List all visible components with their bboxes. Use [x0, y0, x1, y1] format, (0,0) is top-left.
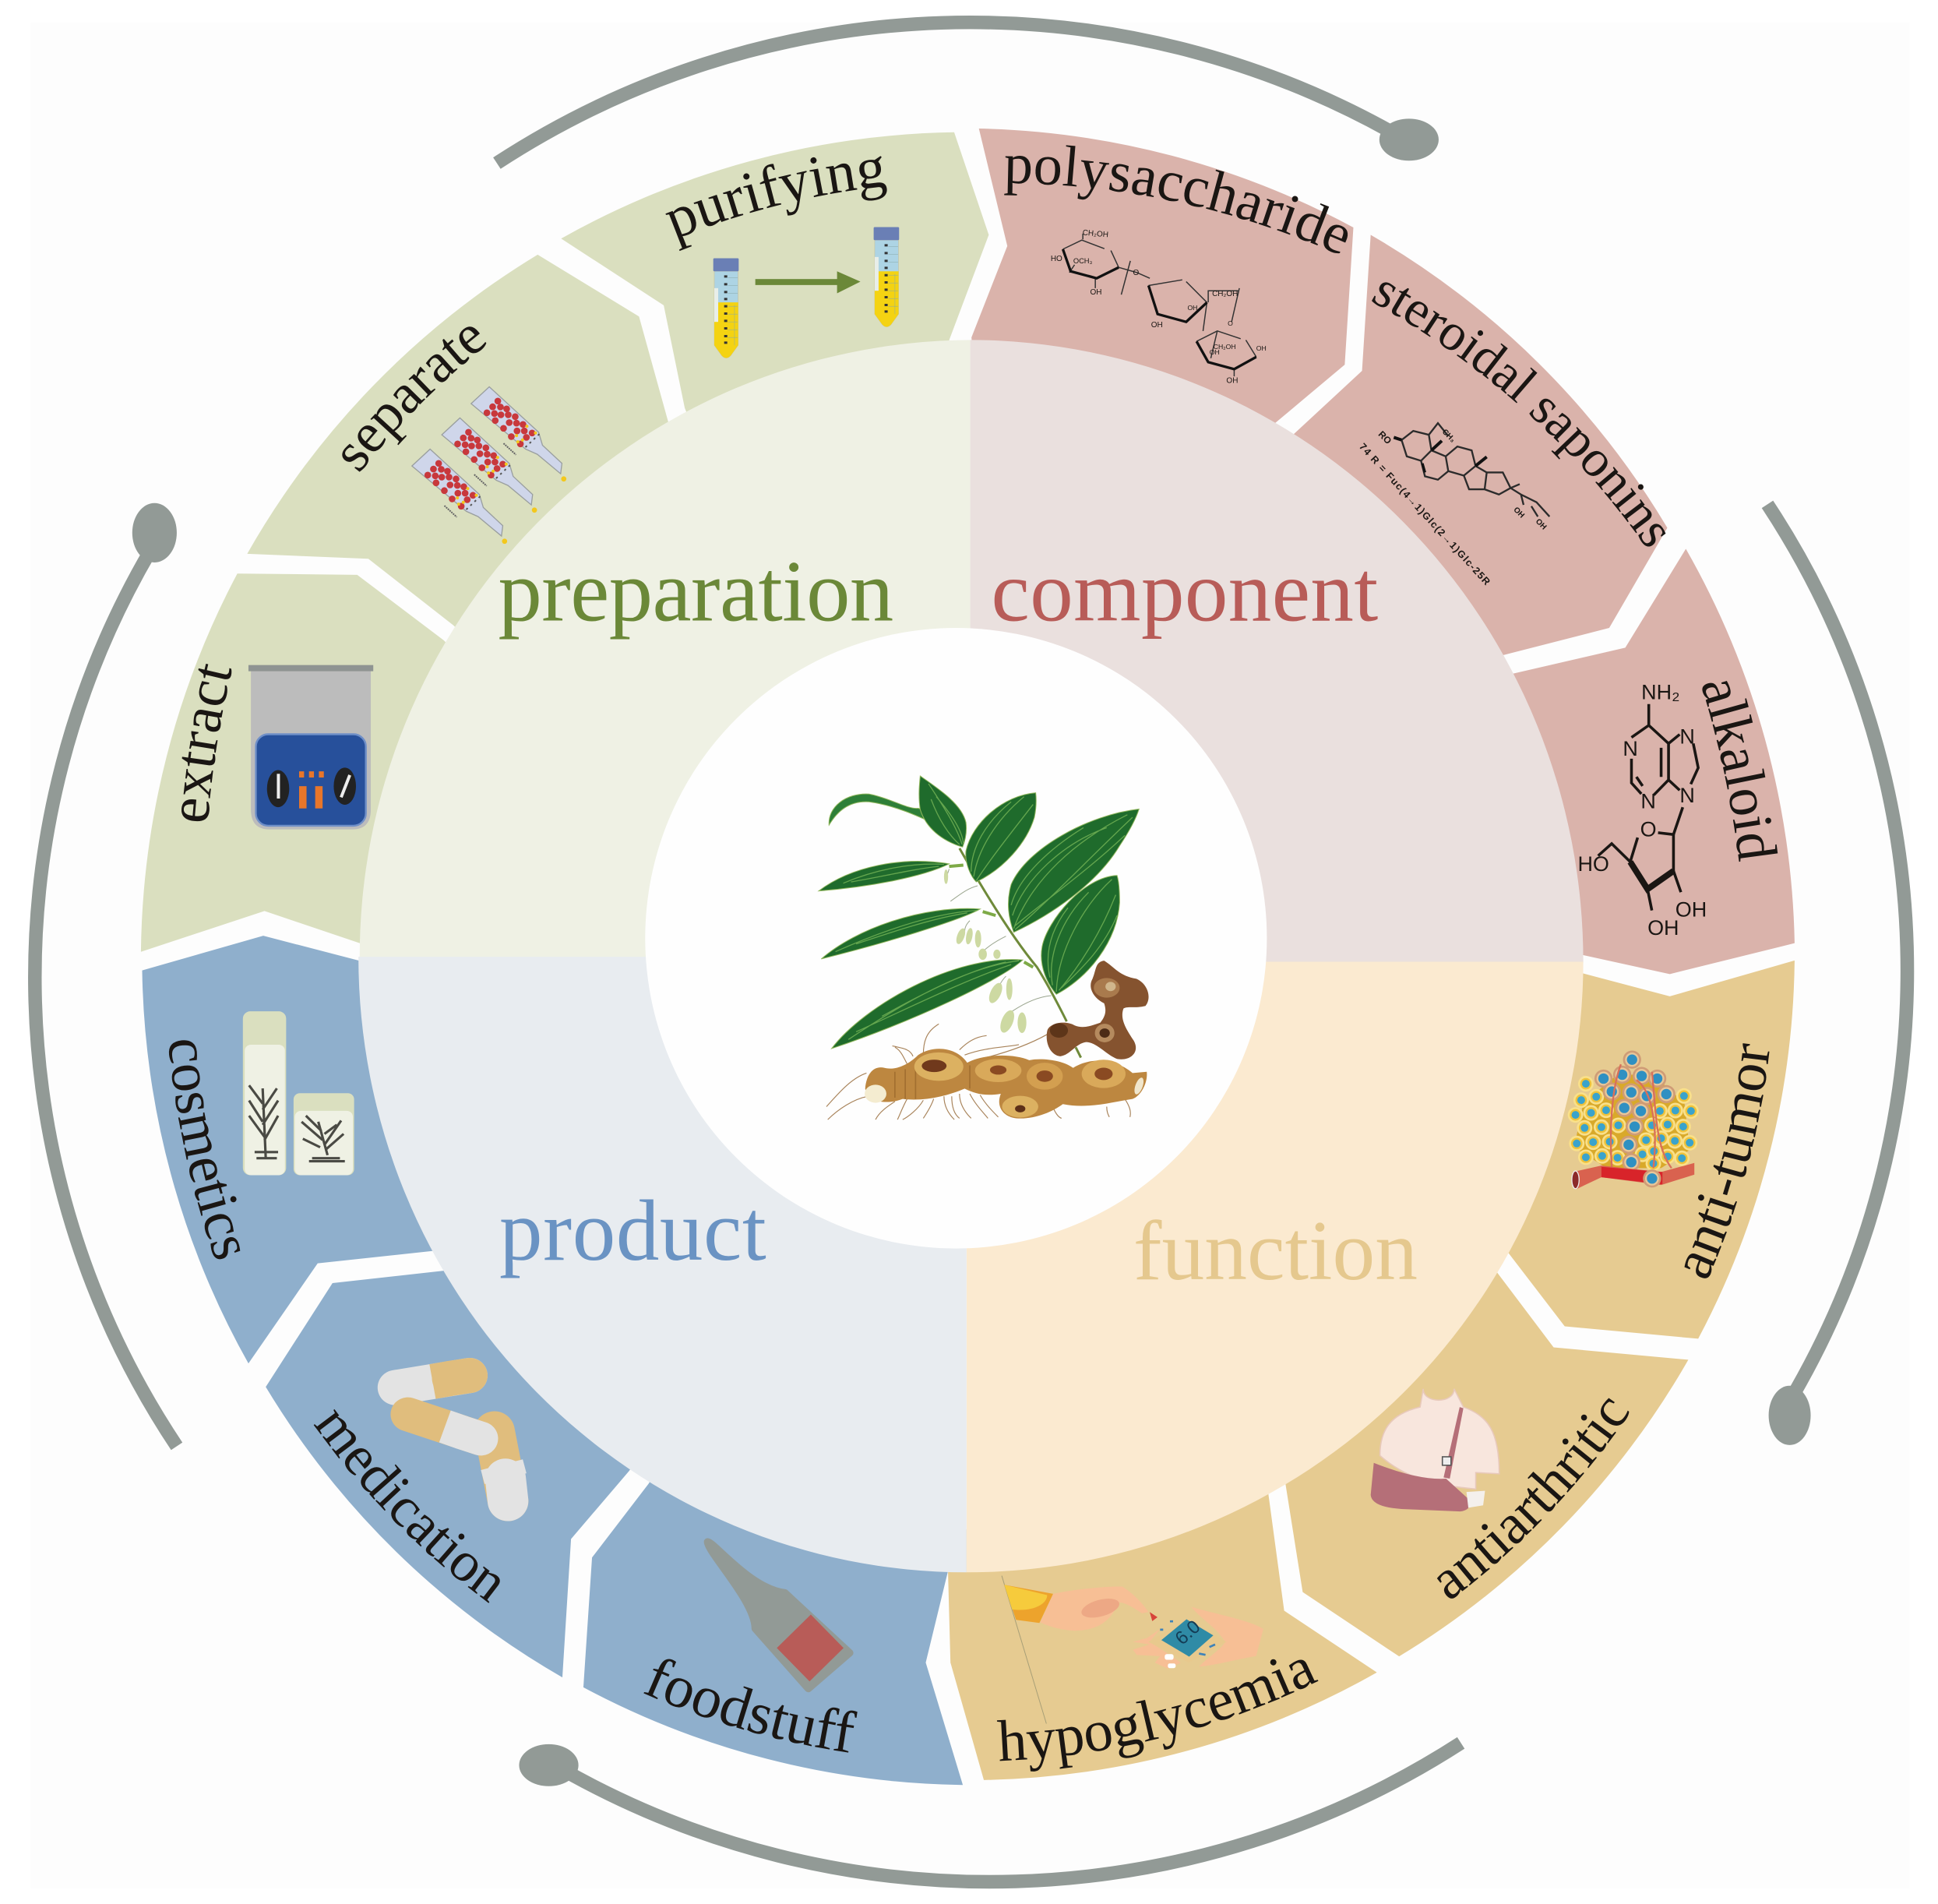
chemical structure: adenosine: OH [1647, 916, 1679, 940]
plant: dark rhizome [1047, 961, 1149, 1060]
chemical structure: steroidal saponin: RO [1376, 428, 1394, 446]
plant: roots [826, 1024, 1130, 1119]
sector: antiarthritic [1273, 1261, 1688, 1656]
arc: bottom with end dot [519, 1743, 1461, 1882]
chemical structure: adenosine: O [1640, 818, 1657, 841]
label: medication: medication [313, 1409, 500, 1603]
chemical structure: adenosine: N [1679, 784, 1695, 807]
inner white circle [645, 628, 1267, 1249]
chemical structure: steroidal saponin: OH [1534, 517, 1548, 531]
sector: separate [247, 255, 686, 661]
chemical structure: polysaccharide: O [1228, 319, 1233, 327]
chemical structure: steroidal saponin: CH₃ [1440, 428, 1457, 445]
heading: function: function [1133, 1203, 1418, 1298]
label: hypoglycemia: hypoglycemia [997, 1659, 1318, 1772]
plant: leaves [819, 776, 1139, 1049]
chemical structure: polysaccharide: OH [1187, 304, 1197, 312]
heading: component: component [992, 545, 1378, 640]
heading: preparation: preparation [498, 544, 893, 640]
chemical structure: polysaccharide: OCH₃ [1073, 257, 1093, 265]
chemical structure: adenosine: NH₂ [1641, 681, 1680, 703]
chemical structure: adenosine: N [1623, 737, 1638, 760]
label: steroidal saponins: steroidal saponins [1372, 282, 1665, 547]
label: foodstuff: foodstuff [643, 1659, 858, 1753]
sector: steroidal saponins [1273, 234, 1667, 668]
quadrant: preparation [360, 340, 971, 959]
chemical structure: polysaccharide: O [1133, 269, 1139, 277]
chemical structure: polysaccharide: CH₂OH [1214, 343, 1236, 351]
chemical structure: polysaccharide: OH [1226, 376, 1238, 385]
chemical structure: polysaccharide: OH [1210, 348, 1220, 356]
label: polysaccharide: polysaccharide [1004, 145, 1348, 254]
plant: tan rhizome [865, 1049, 1147, 1119]
plant: stem and flower stalks [946, 848, 1081, 1058]
quadrant: function [967, 961, 1584, 1572]
chemical structure: polysaccharide: OH [1151, 321, 1163, 330]
icon: glucose meter and hands: 6.0 [1172, 1617, 1204, 1649]
sector: hypoglycemia [948, 1458, 1377, 1780]
quadrant: component [971, 340, 1584, 963]
chemical structure: adenosine: OH [1675, 898, 1707, 921]
sector: foodstuff [583, 1446, 963, 1785]
chemical structure: polysaccharide: OH [1256, 344, 1267, 352]
chemical structure: polysaccharide: CH₂OH [1082, 229, 1108, 239]
label: extract: extract [181, 664, 232, 821]
sector: polysaccharide [971, 129, 1353, 457]
quadrant: product [358, 957, 967, 1572]
arc: right with end dot [1767, 504, 1908, 1445]
label: purifying: purifying [665, 156, 887, 251]
chemical structure: adenosine [1577, 681, 1707, 940]
arc: left with end dot [35, 503, 177, 1446]
icon: separation cartridges [412, 386, 566, 544]
chemical structure: polysaccharide [1051, 229, 1267, 385]
sector: anti-tumor [1471, 961, 1795, 1338]
icon: ultrasonic extractor [248, 665, 373, 830]
sector: cosmetics [142, 936, 457, 1363]
heading: product: product [499, 1183, 766, 1279]
chemical structure: steroidal saponin: 74 R = Fuc(4→1)Glc(2→1)Glc-25R [1357, 441, 1492, 587]
icon: tubes with arrow [714, 227, 899, 358]
chemical structure: polysaccharide: OH [1090, 288, 1101, 297]
arc: top with end dot [497, 23, 1439, 163]
central plant illustration [819, 776, 1149, 1119]
sector: extract [141, 573, 495, 952]
chemical structure: adenosine: HO [1577, 852, 1609, 876]
plant: leaf veins [836, 784, 1133, 1039]
label: cosmetics: cosmetics [168, 1040, 240, 1259]
chemical structure: polysaccharide: HO [1051, 255, 1062, 263]
icon: foodstuff bottle [707, 1542, 850, 1689]
chemical structure: steroidal saponin: OH [1512, 506, 1526, 520]
icon: glucose meter and hands [1002, 1576, 1263, 1723]
label: alkaloid: alkaloid [1702, 681, 1778, 862]
label: separate: separate [342, 326, 486, 472]
icon: arm sling [1371, 1389, 1499, 1511]
label: anti-tumor: anti-tumor [1684, 1043, 1770, 1278]
plant: flower buds [944, 869, 1027, 1035]
chemical structure: adenosine: N [1679, 725, 1695, 748]
sector: purifying [561, 132, 988, 457]
chemical structure: adenosine: N [1640, 790, 1656, 813]
chemical structure: steroidal saponin [1357, 423, 1549, 587]
icon: tumor with blood vessel [1568, 1050, 1699, 1189]
icon: cosmetic bottles [243, 1011, 354, 1175]
icon: capsules [396, 1376, 508, 1501]
label: antiarthritic: antiarthritic [1436, 1398, 1630, 1599]
sector: medication [266, 1249, 655, 1677]
sector: alkaloid [1483, 548, 1795, 974]
chemical structure: polysaccharide: CH₂OH [1212, 290, 1238, 298]
